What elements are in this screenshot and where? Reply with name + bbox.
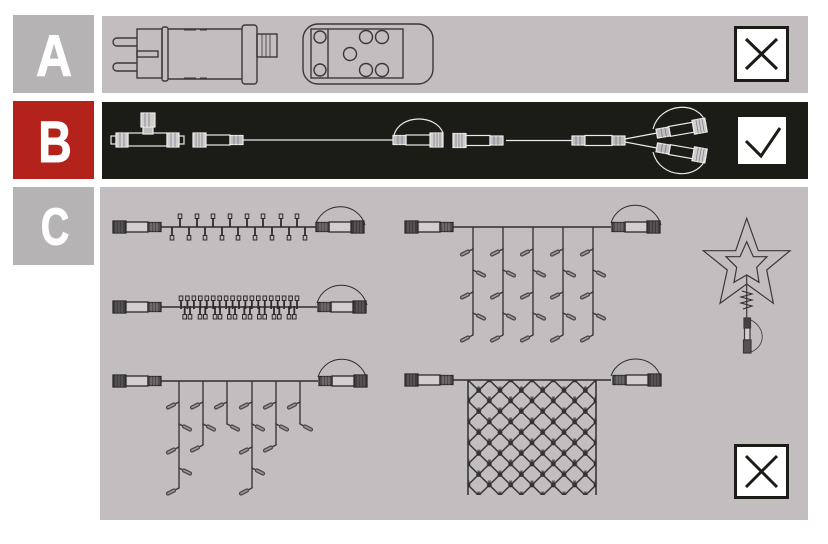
tile: letter B (13, 101, 94, 179)
panel A: power supply and remote (102, 16, 808, 93)
icon: T splitter (111, 113, 184, 147)
icon: crossed box (736, 446, 788, 498)
icon: remote control (303, 24, 433, 84)
net light (405, 359, 661, 495)
icon: star tree topper (703, 218, 790, 353)
icicle light with uneven drops (113, 359, 367, 494)
tile: letter A: A (36, 25, 72, 89)
icon: power adapter plug (113, 25, 277, 84)
icon: crossed box (736, 28, 788, 80)
Y splitter body (572, 136, 625, 146)
tile: letter A (13, 15, 94, 93)
Y split cable with connectors (453, 107, 707, 174)
tile: letter C: C (41, 197, 69, 256)
curtain light with even drops (405, 205, 661, 340)
panel C: incompatible light strings (100, 187, 808, 520)
string light with dense bulbs (113, 285, 367, 319)
tile: letter C (13, 187, 94, 265)
extension cable with connectors (193, 119, 443, 147)
icon: check box (738, 117, 786, 164)
tile: letter B: B (38, 110, 72, 175)
string light with sparse bulbs (113, 207, 365, 240)
panel B: compatible connection cables (102, 102, 808, 179)
